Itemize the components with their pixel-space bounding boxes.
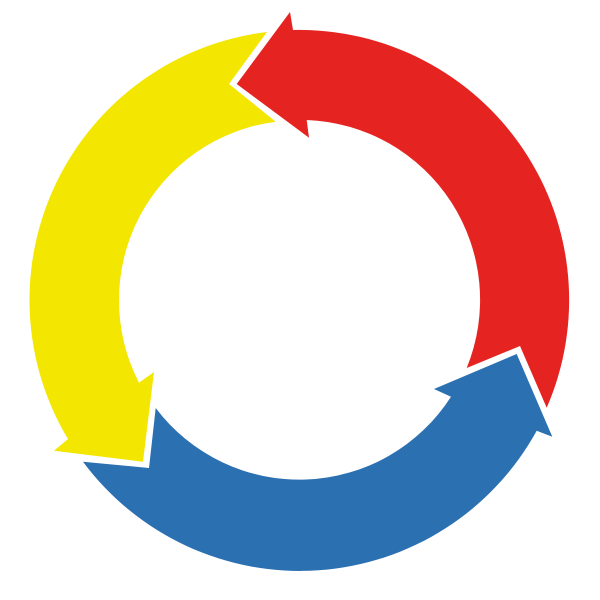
arrow: blue xyxy=(83,354,552,571)
arrow: yellow xyxy=(29,32,276,462)
arrow: red xyxy=(237,12,569,408)
